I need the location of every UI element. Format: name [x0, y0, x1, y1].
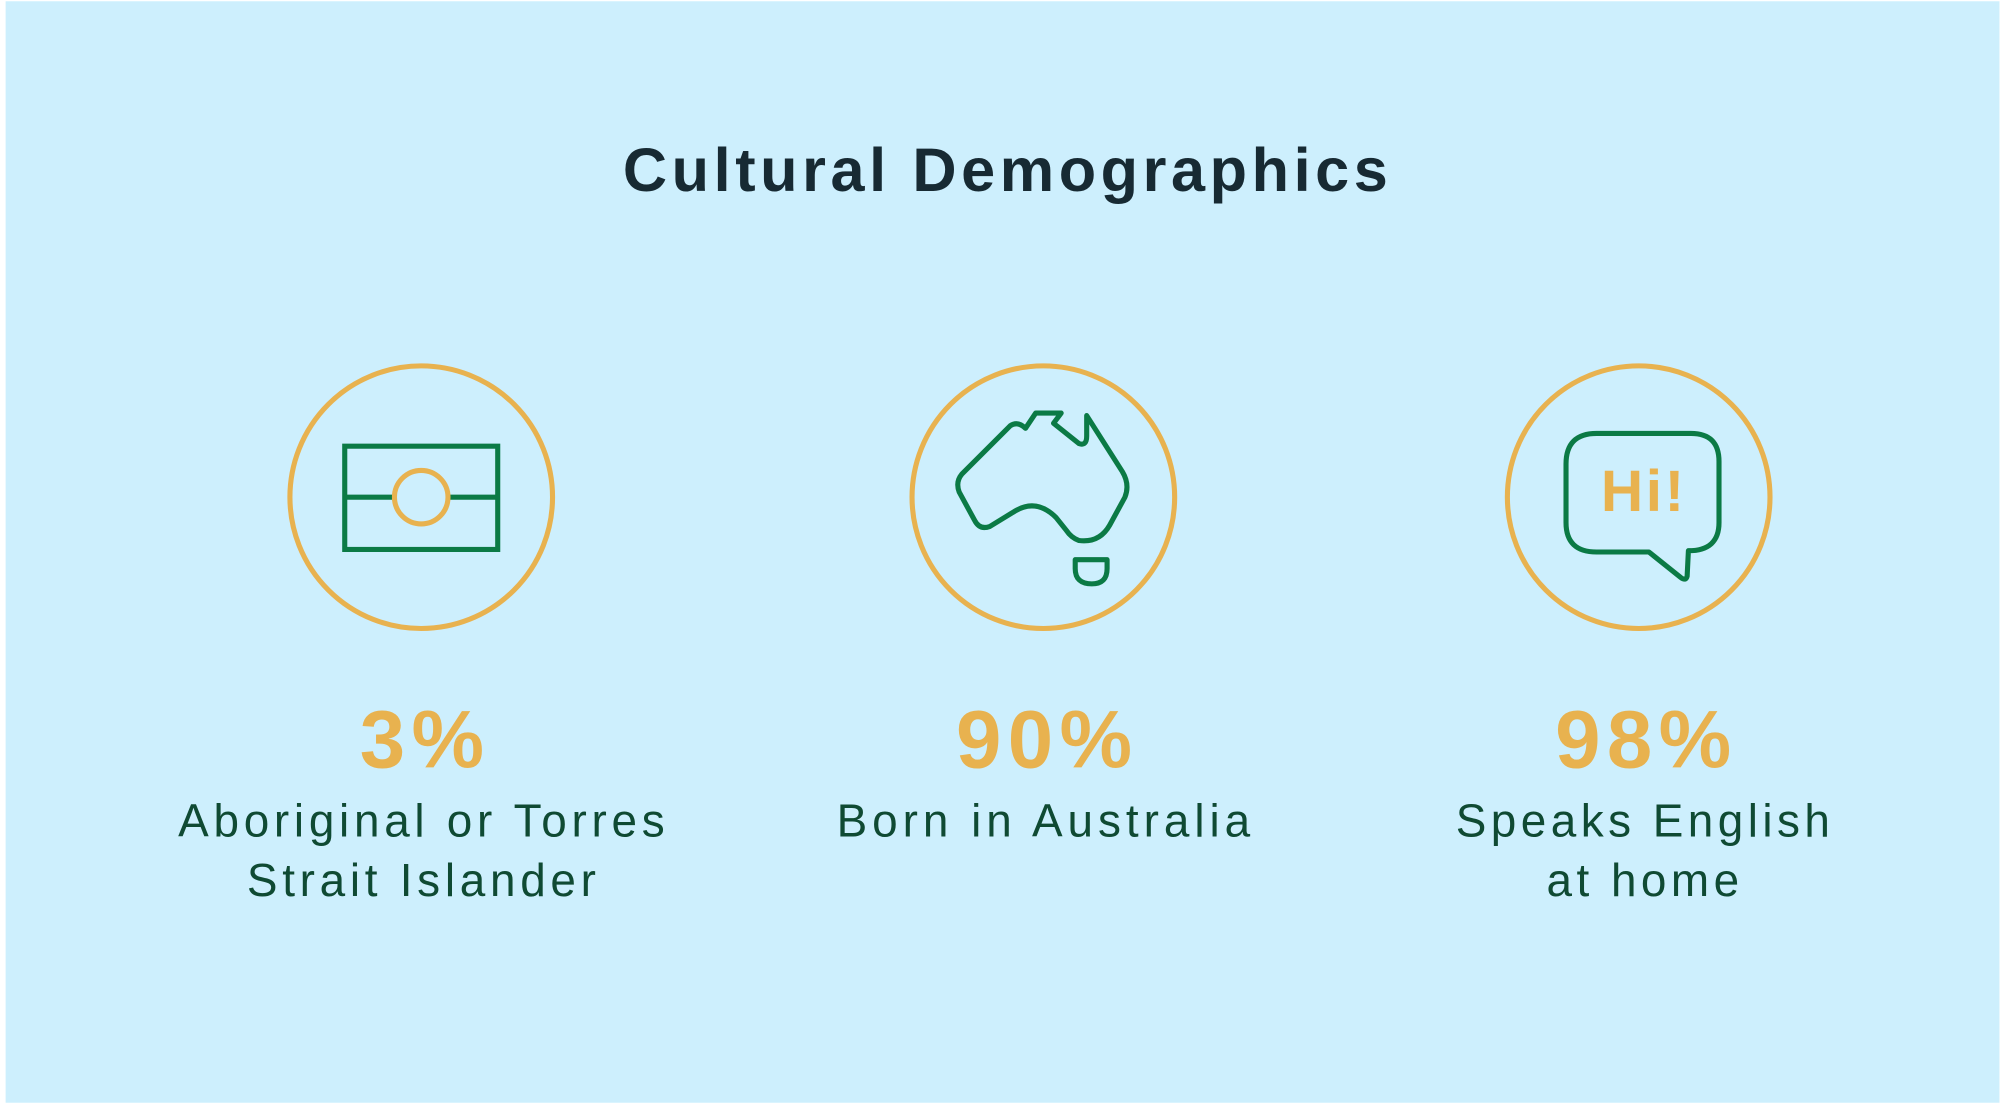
icon: speech bubble [1507, 366, 1770, 628]
title: Cultural Demographics [623, 136, 1392, 204]
panel: english [1456, 366, 1834, 906]
label: born: Born in Australia [837, 794, 1255, 846]
icon: speech bubble: Hi! [1601, 459, 1687, 524]
stat: 90%: 90% [956, 694, 1138, 785]
icon: flag [290, 366, 553, 628]
label: aboriginal: Aboriginal or Torres [178, 794, 669, 846]
label: english: at home [1547, 854, 1744, 906]
label: english: Speaks English [1456, 794, 1834, 846]
panel: born [837, 366, 1255, 846]
label: aboriginal: Strait Islander [247, 854, 601, 906]
icon: australia map [912, 366, 1175, 628]
stat: 3%: 3% [360, 694, 490, 785]
panel: aboriginal [178, 366, 669, 906]
stat: 98%: 98% [1555, 694, 1738, 785]
